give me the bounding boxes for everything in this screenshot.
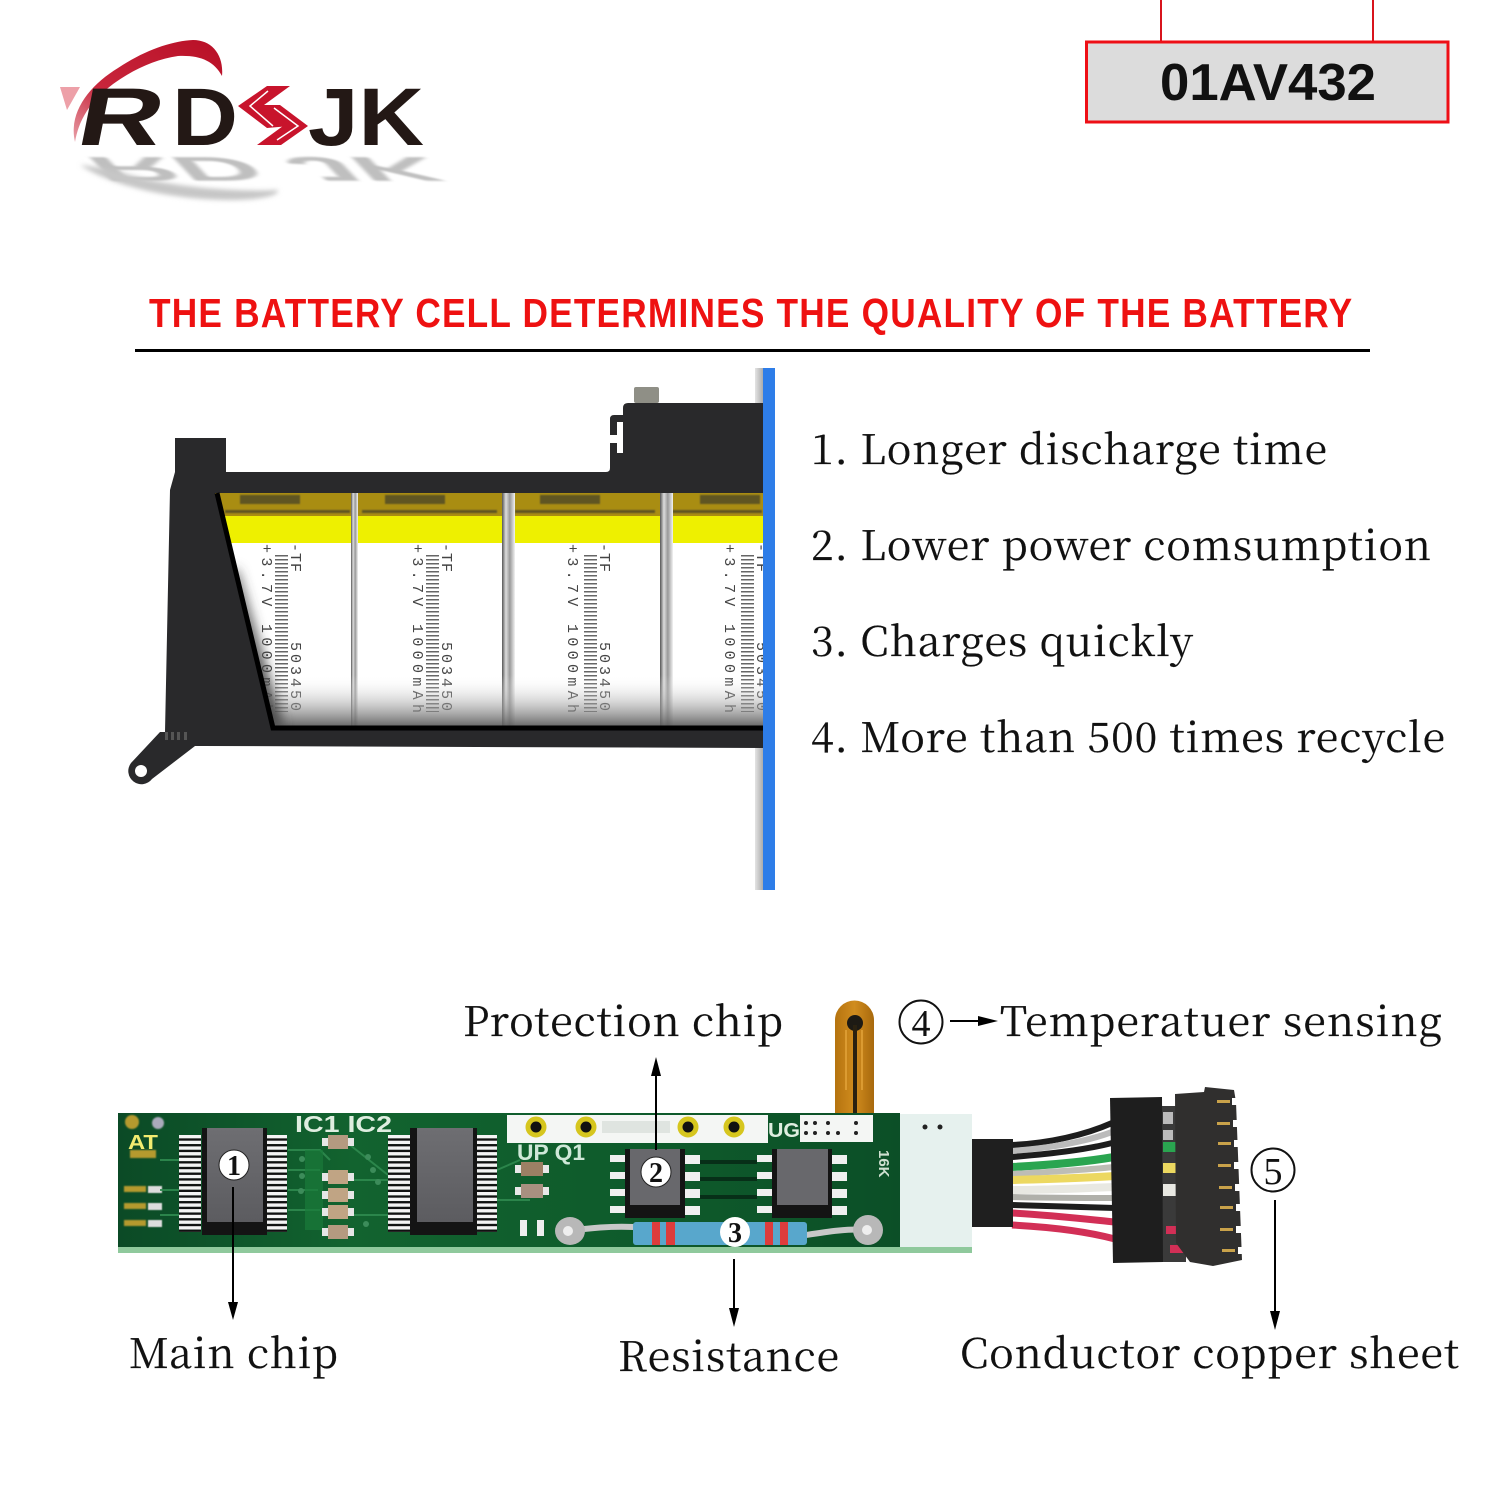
wires (1012, 1123, 1115, 1239)
moulded marks on tab (165, 732, 187, 740)
blue resistor (633, 1222, 807, 1245)
badge 2 (641, 1157, 671, 1189)
silkscreen AT: AT (128, 1132, 158, 1154)
badge 3 (720, 1217, 750, 1249)
cell 4 print: 503450 (752, 642, 769, 712)
cell 4 print: +3.7V 1000mAh (720, 544, 737, 714)
left edge shade (230, 570, 284, 728)
cell 1 print: +3.7V 1000mAh (257, 544, 274, 714)
protection chip pins (610, 1155, 700, 1215)
arrow: conductor copper sheet (1270, 1200, 1280, 1330)
left gold contacts (124, 1115, 164, 1226)
left white pads (148, 1186, 162, 1227)
label: main chip: Main chip (129, 1321, 338, 1380)
logo red arc (74, 40, 222, 142)
item 1: 1. Longer discharge time (811, 417, 1327, 476)
item 2: 2. Lower power comsumption (811, 513, 1431, 572)
mounting hole (135, 765, 147, 777)
arrow: resistance (729, 1259, 739, 1327)
battery illustration (128, 387, 770, 784)
logo letters JK: JK (308, 72, 424, 163)
cell 2 print: +3.7V 1000mAh (408, 544, 425, 714)
logo pink wedge (60, 87, 80, 110)
connector housing (1110, 1097, 1163, 1263)
light green patch (305, 1150, 323, 1230)
connector plug notches (1232, 1098, 1250, 1254)
model label box (1086, 0, 1448, 122)
cell 2 print: -TF (437, 543, 454, 573)
heading: THE BATTERY CELL DETERMINES THE QUALITY OF THE BATTERY (149, 291, 1352, 337)
silkscreen IC1 IC2: IC1 IC2 (295, 1111, 392, 1137)
item 3: 3. Charges quickly (811, 609, 1193, 668)
badge 5: 5 (1264, 1151, 1282, 1193)
connector gold pins (1217, 1100, 1235, 1252)
badge 5 (1252, 1148, 1294, 1193)
capacitors (322, 1135, 354, 1239)
label: temperature sensing: Temperatuer sensing (1000, 989, 1442, 1048)
cell 3 print (568, 544, 610, 712)
arrow: temperature sensing (950, 1016, 998, 1026)
second IC pins (388, 1135, 497, 1232)
end section dots (922, 1124, 942, 1130)
protection chip (625, 1149, 685, 1218)
arrow: protection chip (651, 1057, 661, 1150)
cell 4 print (725, 544, 763, 712)
second mosfet (772, 1149, 832, 1218)
bottom shade (268, 678, 763, 726)
heading underline (135, 349, 1370, 352)
small white pad with dots (800, 1115, 873, 1142)
heat-shrink sleeve (972, 1139, 1013, 1227)
cell 4 print: -TF (752, 543, 769, 573)
logo reflection arc (80, 165, 278, 200)
cell 2 print: 503450 (437, 642, 454, 712)
label: protection chip: Protection chip (463, 989, 783, 1048)
cell 3 print: +3.7V 1000mAh (563, 544, 580, 714)
logo double arrow (238, 86, 308, 145)
gold through-holes (528, 1119, 742, 1135)
window black edge (217, 493, 763, 728)
cell 1 print: 503450 (286, 642, 303, 712)
silkscreen 16K: 16K (875, 1150, 892, 1178)
cell 1 print: -TF (286, 543, 303, 573)
connector plug (1175, 1087, 1242, 1266)
model label box: 01AV432 (1160, 54, 1376, 112)
badge 4: 4 (912, 1003, 930, 1045)
logo: RDJK (60, 40, 456, 200)
board substrate (118, 1113, 900, 1247)
battery cells window (210, 493, 770, 733)
badge 1 (219, 1150, 249, 1182)
second mosfet pins (757, 1155, 847, 1215)
cell 2 print (413, 544, 452, 712)
cell 3 print: 503450 (595, 642, 612, 712)
tape details (225, 495, 762, 513)
cell separators (351, 493, 673, 728)
logo letter D: D (172, 72, 238, 163)
circuit board (118, 1111, 972, 1253)
vias (298, 1154, 381, 1227)
badge 1: 1 (227, 1151, 241, 1182)
cell 3 print: -TF (595, 543, 612, 573)
white end section (900, 1114, 972, 1247)
arrow: main chip (228, 1187, 238, 1320)
small components (515, 1162, 549, 1236)
battery black frame (128, 403, 763, 784)
main chip (202, 1128, 267, 1235)
cell 1 print (262, 544, 301, 712)
frame clip slot (617, 422, 623, 453)
label: conductor copper sheet: Conductor copper sheet (960, 1321, 1459, 1380)
cable bundle (972, 1087, 1250, 1266)
yellow band (210, 516, 770, 543)
white pad strip (507, 1115, 768, 1143)
gold tape band (210, 493, 770, 516)
item 4: 4. More than 500 times recycle (811, 705, 1445, 764)
metal tab (634, 387, 659, 403)
badge 2: 2 (649, 1158, 663, 1189)
second IC (410, 1128, 477, 1235)
logo reflection text: RD JK (75, 149, 456, 188)
feature list (811, 417, 1445, 764)
main chip pins (179, 1135, 287, 1232)
trace links between chips (700, 1162, 757, 1197)
badge 3: 3 (728, 1218, 742, 1249)
board bottom edge (118, 1247, 972, 1253)
label: resistance: Resistance (618, 1324, 839, 1383)
temperature sensor probe (835, 1000, 874, 1113)
logo letter R: R (70, 71, 173, 163)
grey side strip (755, 368, 764, 890)
traces (160, 1145, 530, 1215)
silkscreen UP Q1: UP Q1 (517, 1140, 585, 1165)
badge 4 (900, 1000, 942, 1045)
resistor leads and solder (555, 1215, 883, 1245)
pad strip faint marking (602, 1121, 670, 1133)
silkscreen UG: UG (768, 1120, 800, 1142)
blue side bar (763, 368, 775, 890)
connector back wires (1160, 1106, 1186, 1262)
